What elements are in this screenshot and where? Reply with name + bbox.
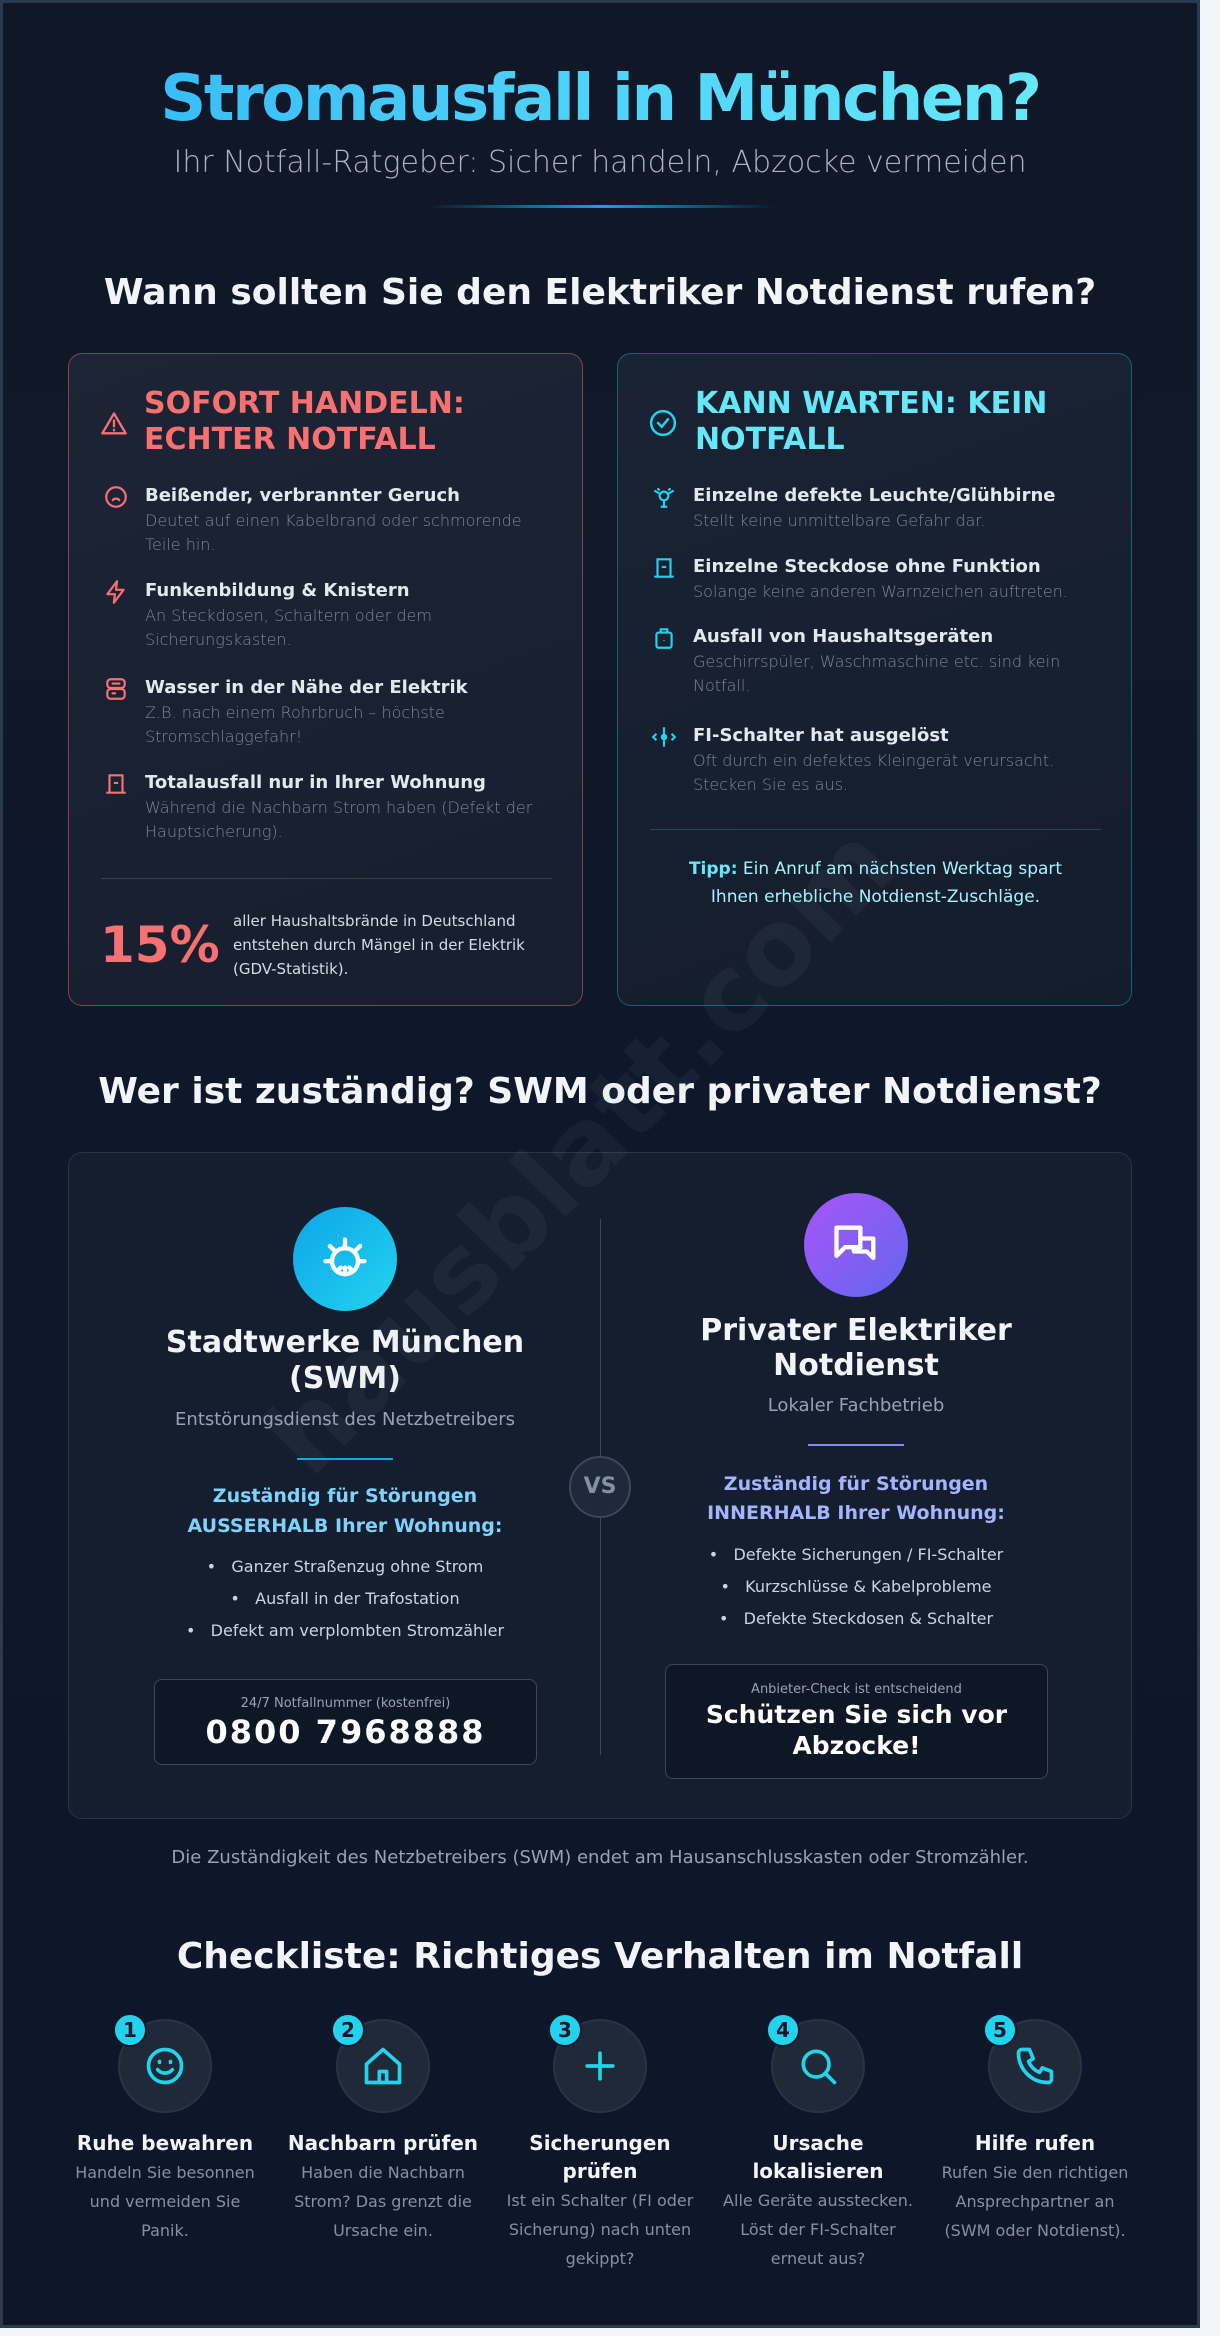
heading: checklist: Checkliste: Richtiges Verhalten im Notfall <box>177 1936 1023 1977</box>
item: sparks: An Steckdosen, Schaltern oder dem <box>145 606 432 625</box>
tip <box>689 859 1062 907</box>
text: hausblatt.com <box>241 802 919 1498</box>
heading: ECHTER NOTFALL <box>144 422 436 457</box>
stat: 15%: 15% <box>100 916 220 974</box>
heading <box>144 386 465 457</box>
hotline box: 0800 7968888 <box>205 1713 486 1751</box>
item: appliances: Ausfall von Haushaltsgeräten <box>693 626 993 647</box>
icon: SWM <box>293 1207 397 1311</box>
item: water <box>106 677 468 746</box>
tip: Tipp: Ein Anruf am nächsten Werktag spart <box>689 859 1062 879</box>
item: smell: Beißender, verbrannter Geruch <box>145 485 460 506</box>
item: sparks: Funkenbildung & Knistern <box>145 580 410 601</box>
step 5 <box>942 2015 1128 2240</box>
step 3: Ist ein Schalter (FI oder <box>507 2191 693 2210</box>
step 4 <box>723 2015 913 2268</box>
step 5: 5 <box>993 2018 1007 2042</box>
step 2: 2 <box>341 2018 355 2042</box>
step 1: und vermeiden Sie <box>90 2192 240 2211</box>
step 5: (SWM oder Notdienst). <box>944 2221 1126 2240</box>
step 1: Panik. <box>141 2221 189 2240</box>
step 1: Handeln Sie besonnen <box>75 2163 255 2182</box>
responsibility: Zuständig für Störungen <box>213 1485 477 1507</box>
title <box>166 1325 524 1396</box>
item: appliances: Geschirrspüler, Waschmaschine etc. sind kein <box>693 652 1060 671</box>
step 2: Haben die Nachbarn <box>301 2163 465 2182</box>
heading: who is responsible: Wer ist zuständig? SWM oder privater Notdienst? <box>98 1071 1102 1112</box>
step 4: Löst der FI-Schalter <box>740 2220 896 2239</box>
stat: 15%: entstehen durch Mängel in der Elektrik <box>233 936 525 954</box>
column: private: • Defekte Sicherungen / FI-Schalter <box>709 1545 1003 1564</box>
text: erneut aus? <box>771 2249 865 2268</box>
item: RCD <box>652 725 1054 794</box>
item: total outage: Totalausfall nur in Ihrer Wohnung <box>145 772 486 793</box>
title: Stadtwerke München <box>166 1325 524 1360</box>
warning box: Anbieter-Check ist entscheidend <box>751 1682 962 1697</box>
item: RCD: Stecken Sie es aus. <box>693 775 848 794</box>
step 3: Sicherungen <box>529 2131 671 2155</box>
hotline box <box>154 1679 537 1765</box>
item: lamp <box>654 485 1056 530</box>
item: appliances <box>655 626 1060 695</box>
tip: Ihnen erhebliche Notdienst-Zuschläge. <box>711 887 1040 907</box>
column: private: Zuständig für Störungen <box>724 1473 988 1495</box>
item: socket <box>654 556 1068 601</box>
column: private: • Defekte Steckdosen & Schalter <box>719 1609 993 1628</box>
item: total outage <box>106 772 532 841</box>
step 4: 4 <box>776 2018 790 2042</box>
icon: warning <box>101 412 127 434</box>
item: socket: Solange keine anderen Warnzeichen auftreten. <box>693 582 1068 601</box>
item: water: Stromschlaggefahr! <box>145 727 302 746</box>
step 2: Ursache ein. <box>333 2221 433 2240</box>
item: smell <box>105 485 522 554</box>
responsibility: AUSSERHALB Ihrer Wohnung: <box>188 1515 502 1537</box>
column: private <box>665 1193 1048 1779</box>
column: SWM: • Ganzer Straßenzug ohne Strom <box>207 1557 483 1576</box>
step 3 <box>507 2015 694 2268</box>
stat: 15% <box>100 912 525 978</box>
VS badge <box>569 1456 631 1518</box>
stat: 15%: aller Haushaltsbrände in Deutschland <box>233 912 516 930</box>
step 2: Nachbarn prüfen <box>288 2131 478 2155</box>
step 5: Rufen Sie den richtigen <box>942 2163 1128 2182</box>
warning box: Schützen Sie sich vor <box>706 1700 1007 1729</box>
responsibility <box>188 1485 502 1537</box>
hotline box: 24/7 Notfallnummer (kostenfrei) <box>241 1696 450 1711</box>
panel: emergency <box>68 353 583 1006</box>
text: gekippt? <box>566 2249 634 2268</box>
heading: NOTFALL <box>695 422 845 457</box>
warning box: Abzocke! <box>792 1731 921 1760</box>
column: SWM: Entstörungsdienst des Netzbetreibers <box>175 1409 515 1430</box>
panel: can wait <box>617 353 1132 1006</box>
VS badge: VS <box>584 1474 616 1499</box>
step 5: Ansprechpartner an <box>956 2192 1114 2211</box>
item: lamp: Einzelne defekte Leuchte/Glühbirne <box>693 485 1056 506</box>
column: SWM <box>154 1207 537 1765</box>
item: water: Z.B. nach einem Rohrbruch – höchste <box>145 703 445 722</box>
step 2 <box>288 2015 478 2240</box>
item: RCD: FI-Schalter hat ausgelöst <box>693 725 949 746</box>
step 4: Alle Geräte ausstecken. <box>723 2191 913 2210</box>
step 1 <box>75 2015 255 2240</box>
column: private: Notdienst <box>773 1348 939 1383</box>
panel: comparison <box>68 1152 1132 1819</box>
column: private: • Kurzschlüsse & Kabelprobleme <box>720 1577 992 1596</box>
item: total outage: Hauptsicherung). <box>145 822 283 841</box>
heading: KANN WARTEN: KEIN <box>695 386 1047 421</box>
step 1: 1 <box>123 2018 137 2042</box>
footnote: Die Zuständigkeit des Netzbetreibers (SWM) endet am Hausanschlusskasten oder Stromzähler. <box>171 1847 1029 1868</box>
heading <box>695 386 1047 457</box>
warning box <box>665 1664 1048 1779</box>
item: water: Wasser in der Nähe der Elektrik <box>145 677 468 698</box>
icon: chat <box>804 1193 908 1297</box>
column: SWM: • Defekt am verplombten Stromzähler <box>186 1621 504 1640</box>
title: Stromausfall in München? <box>160 62 1040 136</box>
step 1: Ruhe bewahren <box>77 2131 253 2155</box>
item: smell: Teile hin. <box>145 535 216 554</box>
item: smell: Deutet auf einen Kabelbrand oder schmorende <box>145 511 522 530</box>
step 4: lokalisieren <box>752 2159 884 2183</box>
heading: when to call: Wann sollten Sie den Elektriker Notdienst rufen? <box>104 272 1096 313</box>
stat: 15%: (GDV-Statistik). <box>233 960 348 978</box>
step 3: Sicherung) nach unten <box>509 2220 691 2239</box>
column: private: Lokaler Fachbetrieb <box>768 1395 944 1416</box>
column: private: INNERHALB Ihrer Wohnung: <box>707 1502 1005 1524</box>
step 3: prüfen <box>563 2159 637 2183</box>
item: RCD: Oft durch ein defektes Kleingerät verursacht. <box>693 751 1054 770</box>
step 3: 3 <box>558 2018 572 2042</box>
item: sparks: Sicherungskasten. <box>145 630 292 649</box>
subtitle: Ihr Notfall-Ratgeber: Sicher handeln, Abzocke vermeiden <box>173 145 1027 180</box>
item: socket: Einzelne Steckdose ohne Funktion <box>693 556 1041 577</box>
step 2: Strom? Das grenzt die <box>294 2192 472 2211</box>
heading: SOFORT HANDELN: <box>144 386 465 421</box>
item: sparks <box>106 580 432 649</box>
column: private: Privater Elektriker <box>700 1313 1012 1348</box>
step 4: Ursache <box>772 2131 864 2155</box>
icon: check <box>650 410 676 436</box>
item: lamp: Stellt keine unmittelbare Gefahr dar. <box>693 511 985 530</box>
step 5: Hilfe rufen <box>975 2131 1095 2155</box>
title: (SWM) <box>289 1361 401 1396</box>
column: SWM: • Ausfall in der Trafostation <box>230 1589 460 1608</box>
item: appliances: Notfall. <box>693 676 750 695</box>
item: total outage: Während die Nachbarn Strom haben (Defekt der <box>145 798 532 817</box>
